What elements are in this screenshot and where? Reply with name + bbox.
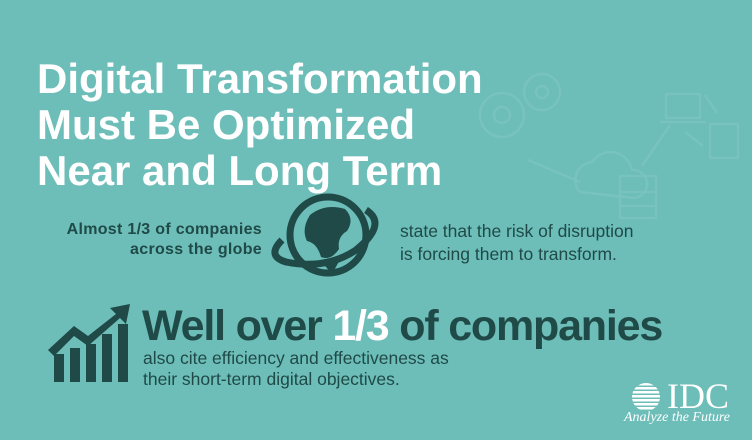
title: Digital Transformation (37, 55, 483, 102)
logo: IDC: IDC (667, 376, 729, 416)
text block: left statement: Almost 1/3 of companies (67, 221, 262, 238)
title (37, 55, 483, 194)
icon: growth bar chart (48, 304, 130, 382)
text block: stat description: their short-term digital objectives. (143, 369, 400, 389)
text block: right statement (400, 221, 633, 264)
title: Near and Long Term (37, 147, 442, 194)
logo: IDC: Analyze the Future (624, 410, 730, 425)
text block: left statement (67, 221, 262, 258)
background decoration: network icons (479, 73, 739, 219)
icon: globe with orbit arrow (271, 194, 378, 276)
text block: right statement: is forcing them to transform. (400, 244, 617, 264)
logo: IDC (623, 376, 730, 425)
headline stat: Well over 1/3 of companies (142, 302, 662, 350)
text block: right statement: state that the risk of disruption (400, 221, 633, 241)
text block: left statement: across the globe (130, 241, 262, 258)
text block: stat description: also cite efficiency and effectiveness as (143, 348, 449, 368)
text block: stat description (143, 348, 449, 389)
title: Must Be Optimized (37, 101, 415, 148)
